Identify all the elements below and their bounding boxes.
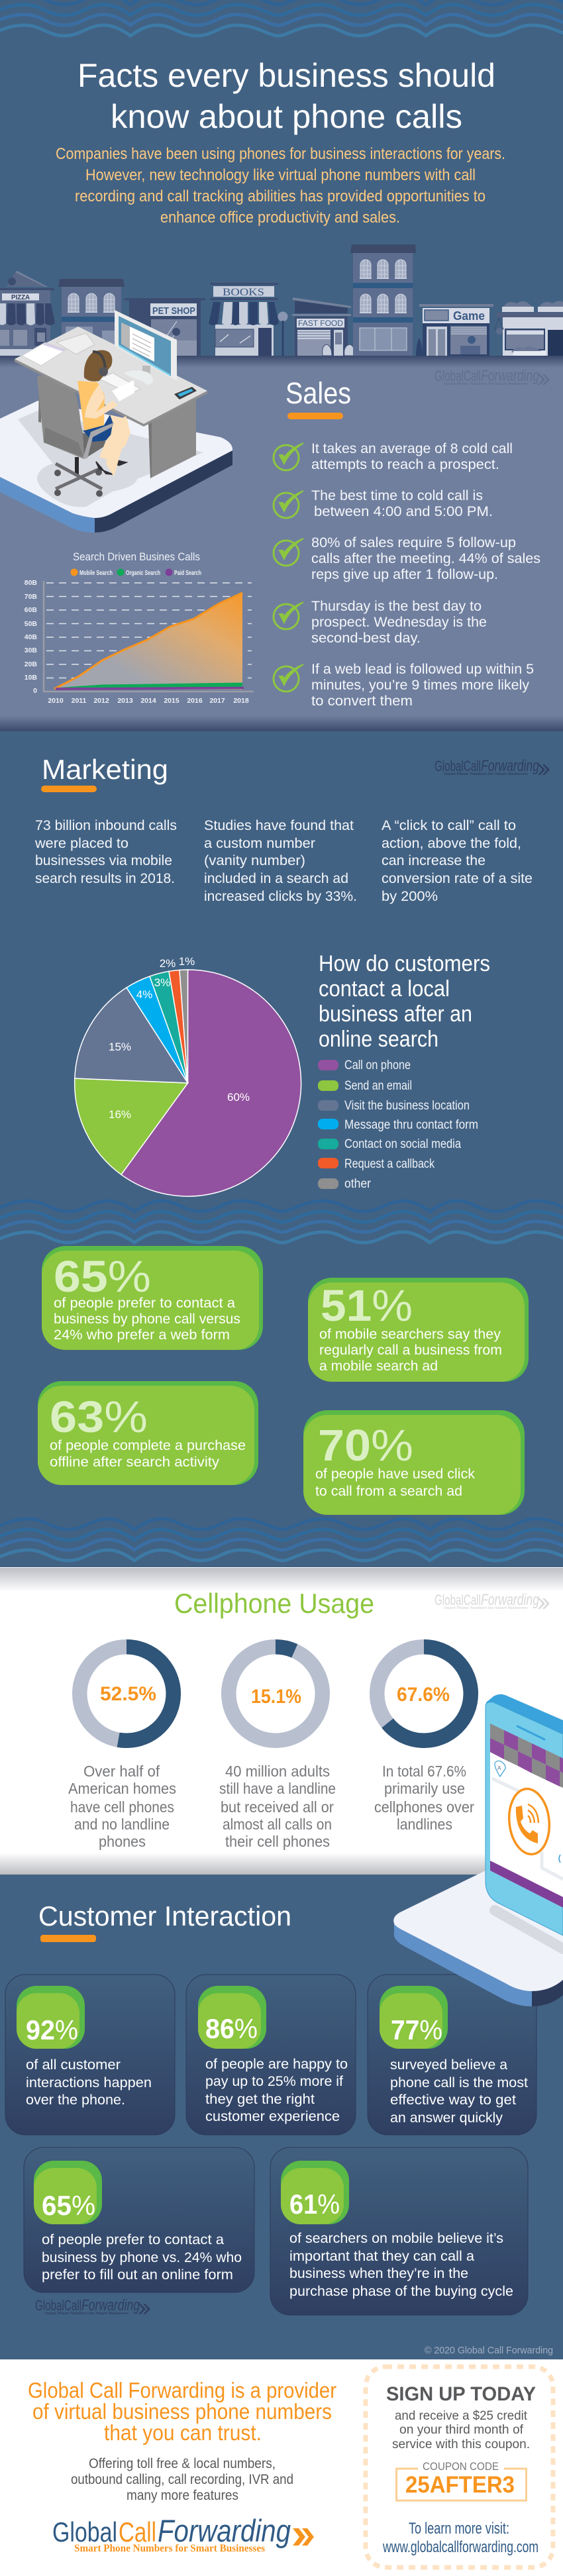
chart: pie of contact methods: 3%: [154, 976, 170, 989]
title: Facts every business should: [77, 57, 495, 94]
decoration: top waves: [0, 0, 563, 36]
logo watermark: GlobalCall: [435, 758, 481, 774]
intro paragraph: Companies have been using phones for business interactions for years.: [56, 145, 505, 163]
stat card: 51%: a mobile search ad: [319, 1358, 438, 1374]
donut caption 3: landlines: [397, 1816, 452, 1833]
copyright: © 2020 Global Call Forwarding: [425, 2345, 553, 2356]
logo watermark: GlobalCall: [435, 368, 481, 384]
stat panel: 77%: 77%: [391, 2014, 442, 2045]
logo: Forwarding: [158, 2513, 291, 2548]
x axis labels: 2017: [209, 697, 225, 705]
logo watermark: Smart Phone Numbers for Smart Businesses: [44, 2311, 128, 2316]
illustration: storefront street: [0, 244, 563, 356]
donut caption 1: [68, 1763, 176, 1850]
coupon text: service with this coupon.: [392, 2437, 530, 2451]
stat card: 51%: of mobile searchers say they: [319, 1326, 501, 1342]
check item 2: [274, 488, 493, 519]
fact column 1: [34, 818, 177, 886]
stat panel: 92%: [5, 1975, 175, 2135]
coupon code: 25AFTER3: [405, 2472, 515, 2498]
stat card: 65%: of people prefer to contact a: [54, 1295, 235, 1311]
illustration: woman at desk on platform: [0, 310, 232, 533]
chart: pie of contact methods: 1%: [179, 955, 195, 968]
building: pet shop: PET SHOP: [152, 305, 195, 317]
panel: sales: [25, 367, 550, 709]
x axis labels: 2014: [140, 697, 156, 705]
features text: outbound calling, call recording, IVR and: [71, 2472, 293, 2487]
stat panel: 61%: purchase phase of the buying cycle: [289, 2283, 513, 2299]
panel: cellphone usage background: [0, 1567, 563, 1879]
donut caption 3: [374, 1763, 474, 1833]
stat panel: 61%: [270, 2147, 528, 2315]
panel: marketing background: [0, 731, 563, 1567]
visit text: To learn more visit:: [409, 2520, 509, 2538]
stat card: 70%: to call from a search ad: [315, 1483, 462, 1499]
pie legend: Visit the business location: [344, 1099, 470, 1113]
x axis labels: [48, 697, 249, 705]
stat panel: 92%: over the phone.: [26, 2092, 125, 2108]
desk: [15, 327, 207, 478]
y axis labels: 60B: [25, 606, 37, 614]
stat card: 65%: 65%: [54, 1252, 151, 1302]
coupon text: [392, 2408, 530, 2451]
floor shadow: [18, 411, 203, 507]
building: game store: Game: [453, 309, 485, 323]
building: fast food: FAST FOOD: [298, 319, 343, 328]
y axis labels: 10B: [25, 674, 37, 682]
x axis labels: 2015: [164, 697, 179, 705]
fact column 3: [382, 818, 533, 904]
pie legend: Call on phone: [344, 1058, 411, 1072]
fact column 2: (vanity number): [204, 853, 305, 868]
logo: Call: [119, 2516, 156, 2548]
map roads and pin: [492, 1761, 563, 1879]
header text: [56, 57, 505, 227]
logo watermark: [435, 1591, 550, 1610]
title: know about phone calls: [111, 98, 462, 135]
stat card: 63%: offline after search activity: [50, 1454, 219, 1470]
stat card: 70%: of people have used click: [315, 1466, 475, 1482]
x axis labels: 2011: [72, 697, 87, 705]
stat panel: 61%: 61%: [289, 2189, 340, 2220]
stat panel: 65%: business by phone vs. 24% who: [42, 2249, 242, 2265]
intro paragraph: recording and call tracking abilities has provided opportunities to: [75, 187, 486, 205]
stat card: 63%: [38, 1381, 258, 1485]
y axis labels: [25, 579, 37, 695]
stat panel: 65%: [24, 2147, 254, 2293]
features text: many more features: [127, 2488, 238, 2503]
provider statement: Global Call Forwarding is a provider: [28, 2378, 336, 2402]
provider statement: of virtual business phone numbers: [32, 2399, 332, 2424]
stat panel: 86%: 86%: [205, 2013, 258, 2044]
chart: pie of contact methods: [75, 955, 301, 1196]
check item 3: reps give up after 1 follow-up.: [311, 567, 498, 582]
x axis labels: 2010: [48, 697, 64, 705]
checker banner: [490, 1724, 563, 1788]
chart: pie of contact methods: 60%: [227, 1091, 250, 1104]
check item 4: [274, 599, 487, 646]
stat panel: 65%: prefer to fill out an online form: [42, 2267, 233, 2283]
chart title: Search Driven Busines Calls: [73, 550, 200, 563]
fact column 2: included in a search ad: [204, 871, 348, 886]
y axis labels: 40B: [25, 633, 37, 641]
heading underline: [41, 786, 97, 792]
x axis labels: 2012: [93, 697, 109, 705]
logo: Smart Phone Numbers for Smart Businesses: [74, 2543, 265, 2554]
fact column 1: search results in 2018.: [35, 871, 175, 886]
fact column 3: A “click to call” call to: [382, 818, 516, 833]
intro paragraph: [56, 145, 505, 227]
building: apartment one: [58, 279, 125, 356]
illustration: phone on platform: [393, 1694, 563, 2006]
donut caption 1: and no landline: [74, 1816, 170, 1833]
stat panel: 86%: pay up to 25% more if: [205, 2073, 343, 2089]
stat panel: 77%: [368, 1975, 537, 2135]
fact column 1: businesses via mobile: [35, 853, 172, 868]
fact column 2: [204, 818, 357, 904]
chart legend: Organic Search: [126, 569, 160, 577]
stat card: 65%: 24% who prefer a web form: [54, 1327, 230, 1343]
desk items: document and tablet: [22, 333, 95, 366]
y axis labels: 0: [33, 687, 37, 695]
donut caption 3: primarily use: [384, 1780, 465, 1797]
stat panel: 92%: interactions happen: [26, 2075, 152, 2090]
fact column 3: action, above the fold,: [382, 836, 521, 851]
stat card: 51%: regularly call a business from: [319, 1342, 502, 1358]
heading underline: [40, 1935, 96, 1942]
fact column 2: Studies have found that: [204, 818, 354, 833]
panel: cellphone usage: [68, 1588, 550, 1850]
donut caption 2: their cell phones: [225, 1833, 330, 1850]
donut caption 2: [219, 1763, 336, 1850]
check item 2: between 4:00 and 5:00 PM.: [314, 504, 493, 519]
building: pizza: PIZZA: [11, 294, 30, 301]
series: organic search: [58, 682, 242, 688]
building: book store: [209, 283, 279, 356]
stat card: 63%: of people complete a purchase: [50, 1437, 246, 1453]
check item 3: 80% of sales require 5 follow-up: [311, 535, 516, 550]
stat card: 65%: [42, 1246, 263, 1350]
logo watermark: Smart Phone Numbers for Smart Businesses: [444, 1606, 528, 1610]
check item 4: second-best day.: [311, 631, 421, 646]
logo watermark: Forwarding: [481, 367, 539, 385]
features text: Offering toll free & local numbers,: [89, 2456, 276, 2471]
coupon text: and receive a $25 credit: [395, 2408, 528, 2423]
panel: footer: [28, 2367, 553, 2567]
features text: [71, 2456, 293, 2503]
smartphone on desk: [174, 387, 197, 399]
gridlines and axes: [44, 581, 254, 692]
logo: [52, 2513, 314, 2554]
title: [77, 57, 495, 135]
stat panel: 77%: surveyed believe a: [390, 2057, 507, 2073]
chart: pie of contact methods: 4%: [136, 988, 152, 1001]
pie heading: How do customers: [319, 951, 490, 976]
stat card: 70%: 70%: [318, 1421, 413, 1470]
logo watermark: [435, 757, 550, 776]
building: pizza: [0, 271, 55, 356]
fact column 2: a custom number: [204, 836, 315, 851]
check item 5: to convert them: [311, 694, 413, 709]
stat panel: 86%: they get the right: [205, 2091, 315, 2107]
coupon code label: COUPON CODE: [423, 2460, 499, 2473]
stat panel: 61%: of searchers on mobile believe it’s: [289, 2230, 503, 2246]
logo watermark: GlobalCall: [435, 1592, 481, 1608]
panel: customer interaction: [5, 1900, 553, 2356]
building: tall office: [350, 244, 416, 356]
check item 5: minutes, you’re 9 times more likely: [311, 678, 530, 693]
y axis labels: 70B: [25, 593, 37, 601]
intro paragraph: However, new technology like virtual phone numbers with call: [85, 166, 476, 184]
logo watermark: Forwarding: [481, 1591, 539, 1609]
decoration: middle waves: [0, 1201, 563, 1243]
logo watermark: [435, 367, 550, 386]
building: game store: [416, 304, 493, 356]
coupon dashed border: [366, 2367, 553, 2567]
chart legend: Mobile Search: [79, 569, 113, 577]
stat panel: 86%: [186, 1975, 356, 2135]
donut: 52.5%: 52.5%: [100, 1683, 156, 1705]
phone platform: [393, 1871, 563, 2006]
coupon code box: [396, 2469, 526, 2500]
donut caption 1: have cell phones: [70, 1798, 174, 1816]
pie legend: Request a callback: [344, 1157, 435, 1171]
pie heading: [319, 951, 490, 1052]
donut caption 3: cellphones over: [374, 1798, 474, 1816]
donut: 67.6%: 67.6%: [397, 1684, 450, 1706]
illustration: street lamp: [278, 311, 287, 356]
check item 5: If a web lead is followed up within 5: [311, 662, 534, 677]
pie legend: other: [344, 1177, 372, 1191]
y axis labels: 80B: [25, 579, 37, 587]
stat panel: 65%: of people prefer to contact a: [42, 2232, 224, 2247]
logo watermark: Forwarding: [81, 2296, 140, 2314]
chart: search driven business calls: [25, 550, 254, 705]
decoration: lower waves: [0, 1519, 563, 1561]
logo: Global: [52, 2516, 117, 2548]
check item 3: calls after the meeting. 44% of sales: [311, 551, 540, 566]
check item 1: It takes an average of 8 cold call: [311, 441, 513, 456]
stat card: 51%: 51%: [321, 1281, 413, 1331]
fact column 3: can increase the: [382, 853, 486, 868]
building: book store: BOOKS: [223, 287, 264, 298]
chart: pie of contact methods: 2%: [160, 957, 176, 970]
x axis labels: 2013: [117, 697, 133, 705]
pie legend: Contact on social media: [344, 1137, 461, 1151]
building: flower shop: [495, 301, 563, 356]
provider statement: that you can trust.: [104, 2420, 262, 2445]
x axis labels: 2018: [233, 697, 249, 705]
check item 5: [274, 662, 534, 709]
platform: [0, 401, 232, 533]
fact column 1: 73 billion inbound calls: [35, 818, 177, 833]
y axis labels: 30B: [25, 646, 37, 654]
series: paid search: [56, 688, 244, 689]
sign up heading: SIGN UP TODAY: [386, 2383, 536, 2405]
pie legend: Message thru contact form: [344, 1118, 478, 1132]
donut caption 2: but received all or: [221, 1798, 334, 1816]
stat card: 70%: [303, 1410, 525, 1515]
logo watermark: Smart Phone Numbers for Smart Businesses: [444, 772, 528, 776]
donut caption 1: Over half of: [83, 1763, 160, 1780]
pie legend: Send an email: [344, 1079, 412, 1093]
fact column 3: by 200%: [382, 889, 438, 904]
donut caption 1: American homes: [68, 1780, 176, 1797]
stat card: 51%: [308, 1278, 529, 1382]
icon: call circle: [506, 1787, 552, 1856]
fact column 1: were placed to: [34, 836, 128, 851]
stat panel: 65%: 65%: [42, 2190, 95, 2221]
logo watermark: Forwarding: [481, 757, 539, 775]
series: mobile search area: [54, 593, 242, 690]
woman: [77, 350, 134, 477]
donut caption 1: phones: [99, 1833, 146, 1850]
x axis labels: 2016: [187, 697, 203, 705]
y axis labels: 20B: [25, 660, 37, 668]
stat panel: 61%: business when they’re in the: [289, 2265, 468, 2281]
chart legend: [70, 568, 201, 577]
coupon text: on your third month of: [399, 2422, 524, 2437]
stat panel: 86%: customer experience: [205, 2108, 340, 2124]
stat panel: 92%: of all customer: [26, 2057, 121, 2073]
intro paragraph: enhance office productivity and sales.: [160, 209, 400, 227]
stat panel: 77%: effective way to get: [390, 2092, 516, 2108]
donut: 52.5%: [79, 1647, 174, 1741]
check item 2: The best time to cold call is: [311, 488, 483, 503]
check item 1: attempts to reach a prospect.: [311, 457, 499, 472]
stat panel: 86%: of people are happy to: [205, 2056, 348, 2072]
logo watermark: [35, 2296, 150, 2316]
check item 3: [274, 535, 540, 582]
heading: cellphone usage: Cellphone Usage: [174, 1588, 374, 1619]
stat card: 63%: 63%: [50, 1392, 148, 1442]
chart: pie of contact methods: 16%: [109, 1108, 131, 1121]
heading: customer interaction: Customer Interaction: [38, 1900, 291, 1932]
y axis labels: 50B: [25, 620, 37, 628]
fact column 2: increased clicks by 33%.: [204, 889, 357, 904]
chart legend: Paid Search: [174, 569, 201, 577]
check item 1: [274, 441, 513, 472]
check item 4: Thursday is the best day to: [311, 599, 482, 614]
phone body: [486, 1694, 563, 1935]
map roads and pin: A: [497, 1765, 501, 1771]
building: fast food: [292, 297, 355, 356]
stat panel: 77%: an answer quickly: [390, 2110, 503, 2126]
monitor: [115, 310, 177, 385]
donut: 15.1%: 15.1%: [251, 1686, 301, 1708]
building: pet shop: [125, 298, 205, 356]
donut caption 2: 40 million adults: [225, 1763, 330, 1780]
pie heading: business after an: [319, 1002, 472, 1027]
donut caption 2: almost all calls on: [223, 1816, 332, 1833]
pie heading: online search: [319, 1027, 438, 1052]
fact column 3: conversion rate of a site: [382, 871, 533, 886]
heading underline: [287, 413, 343, 419]
check item 4: prospect. Wednesday is the: [311, 615, 487, 630]
stat panel: 77%: phone call is the most: [390, 2075, 528, 2090]
donut: 67.6%: [377, 1647, 471, 1741]
donut: 15.1%: [229, 1647, 323, 1741]
panel: header background: [0, 0, 563, 358]
stat card: 65%: business by phone call versus: [54, 1311, 240, 1327]
heading: sales: Sales: [285, 376, 351, 410]
keyboard: [99, 373, 140, 394]
donut caption 3: In total 67.6%: [382, 1763, 466, 1780]
pie legend: [318, 1058, 478, 1191]
chair: [37, 376, 111, 497]
pie heading: contact a local: [319, 976, 450, 1002]
chart: pie of contact methods: 15%: [109, 1041, 131, 1053]
panel: marketing: [0, 754, 563, 1561]
heading: marketing: Marketing: [42, 754, 168, 785]
panel: sales background: [0, 356, 563, 731]
stat panel: 61%: important that they can call a: [289, 2248, 474, 2264]
panel: customer interaction background: [0, 1875, 563, 2359]
logo watermark: GlobalCall: [35, 2297, 81, 2314]
donut caption 2: still have a landline: [219, 1780, 336, 1797]
logo watermark: Smart Phone Numbers for Smart Businesses: [444, 382, 528, 386]
provider statement: [28, 2378, 336, 2445]
stat panel: 92%: 92%: [26, 2014, 78, 2045]
coupon: [366, 2367, 553, 2567]
